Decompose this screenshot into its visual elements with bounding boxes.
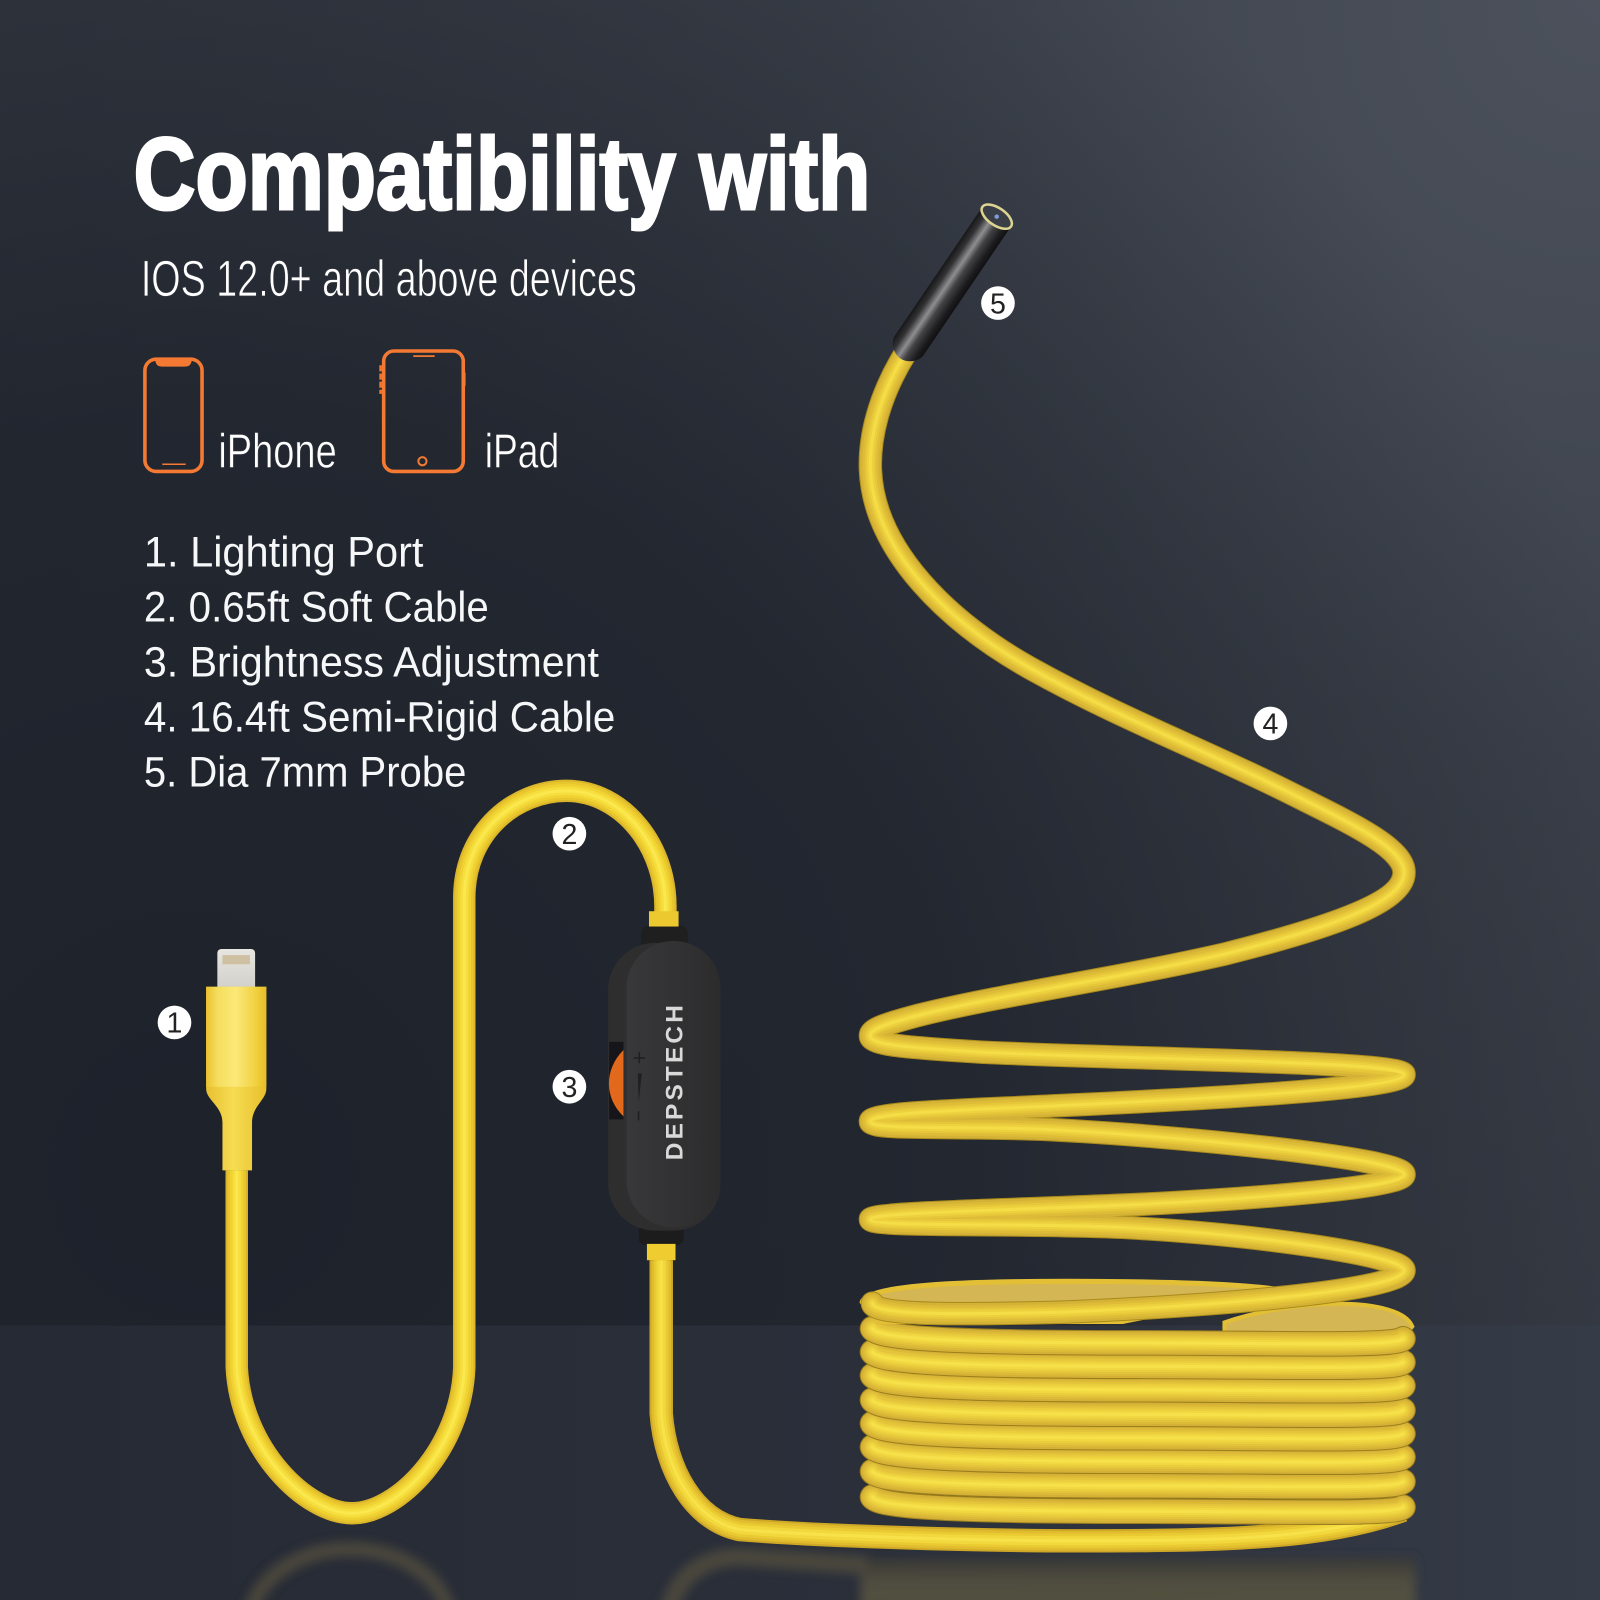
title: Compatibility with [134,117,870,231]
coil top back ring [862,1281,1281,1321]
coil stack [872,1329,1403,1512]
left cable [237,791,665,1513]
right cable [661,1260,1403,1541]
helix cable [870,352,1404,1314]
feature list: 5. Dia 7mm Probe [144,749,466,797]
marker 1: 1 [167,1008,182,1040]
label: iPad: iPad [485,425,559,478]
marker 2: 2 [561,819,577,851]
lightning connector [206,949,266,1170]
feature list: 2. 0.65ft Soft Cable [144,583,489,631]
brightness wheel [609,1042,623,1119]
feature list: 3. Brightness Adjustment [144,639,599,687]
marker 5: 5 [990,288,1006,320]
marker 3: 3 [561,1072,577,1104]
plus and minus marks [634,1052,645,1120]
label: iPhone: iPhone [218,425,337,478]
marker 3 [553,1070,586,1104]
coil second ring back edge [1224,1304,1412,1341]
icon: iPhone [145,359,202,471]
marker 5 [981,286,1015,320]
feature list: 1. Lighting Port [144,528,424,576]
feature list: 4. 16.4ft Semi-Rigid Cable [144,694,615,742]
feature list [144,528,615,797]
marker 4 [1254,707,1287,741]
subtitle: IOS 12.0+ and above devices [141,250,637,307]
marker 2 [553,817,586,851]
marker 1 [158,1006,191,1040]
icon: iPad [381,351,464,471]
probe [886,200,1016,368]
controller [608,911,720,1260]
floor reflections [250,1549,1415,1600]
brand name: DEPSTECH [662,1005,689,1160]
marker 4: 4 [1262,709,1278,741]
